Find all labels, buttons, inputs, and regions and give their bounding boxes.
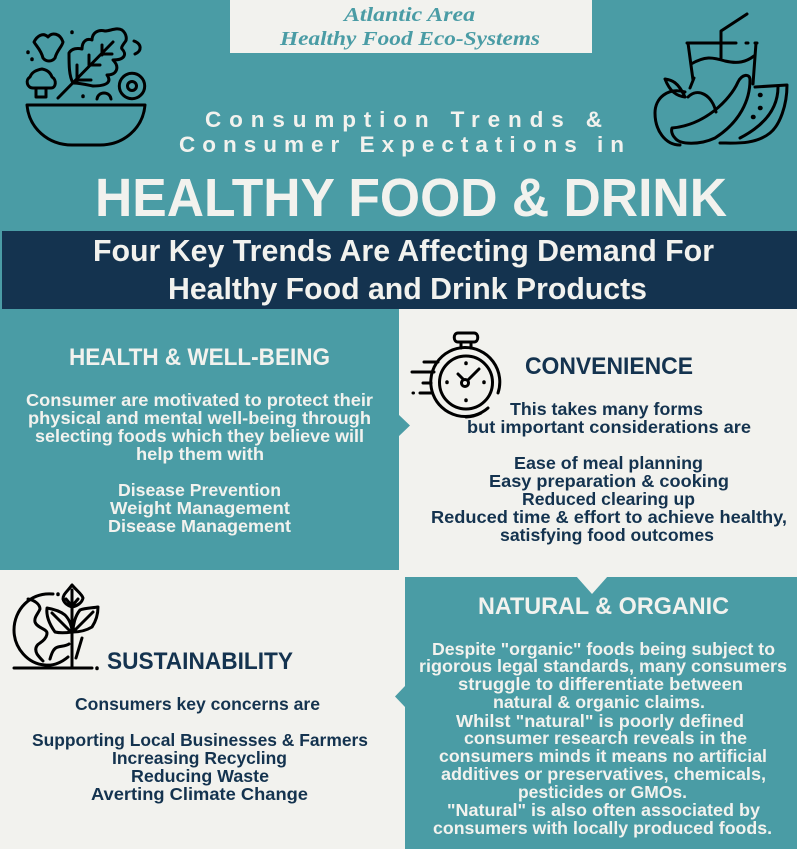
text: natural body: consumers with locally produced foods.	[433, 818, 772, 838]
text: health body: Consumer are motivated to protect their	[26, 390, 373, 410]
text: sustainability body	[32, 694, 368, 804]
text: natural body	[419, 639, 787, 838]
icon: stopwatch	[412, 333, 500, 417]
subtitle: Consumer Expectations in	[179, 132, 624, 157]
text: health body	[26, 390, 373, 536]
panel: health and well-being	[0, 309, 410, 570]
text: natural body: "Natural" is also often associated by	[447, 800, 760, 820]
text: natural body: rigorous legal standards, many consumers	[419, 656, 787, 676]
text: natural body: natural & organic claims.	[493, 692, 705, 712]
text: sustainability body: Increasing Recycling	[112, 748, 287, 768]
text: sustainability body: Averting Climate Change	[91, 784, 308, 804]
text: convenience body: satisfying food outcomes	[500, 525, 714, 545]
text: convenience body: Ease of meal planning	[514, 453, 703, 473]
text: health body: physical and mental well-being through	[28, 408, 371, 428]
text: natural body: struggle to differentiate between	[458, 674, 743, 694]
panel: sustainability	[0, 570, 405, 849]
text: convenience body: Reduced clearing up	[522, 489, 695, 509]
text: natural body: consumers minds it means no artificial	[439, 746, 767, 766]
text: health body: Disease Prevention	[118, 480, 281, 500]
text: health body: help them with	[136, 444, 264, 464]
banner: four key trends: Healthy Food and Drink Products	[168, 271, 647, 306]
text: natural body: consumer research reveals in the	[464, 728, 747, 748]
heading: sustainability: SUSTAINABILITY	[107, 648, 293, 675]
text: convenience body	[431, 399, 787, 545]
subtitle: Consumption Trends &	[205, 107, 602, 132]
pointer: health	[398, 414, 410, 437]
text: convenience body: This takes many forms	[510, 399, 703, 419]
text: natural body: pesticides or GMOs.	[518, 782, 687, 802]
text: health body: selecting foods which they believe will	[35, 426, 364, 446]
text: sustainability body: Consumers key concerns are	[75, 694, 320, 714]
title box: Healthy Food Eco-Systems	[279, 28, 540, 50]
title box: Atlantic Area	[342, 4, 475, 26]
text: sustainability body: Reducing Waste	[131, 766, 269, 786]
heading: natural and organic: NATURAL & ORGANIC	[478, 593, 729, 620]
heading: health and well-being: HEALTH & WELL-BEING	[69, 344, 330, 371]
text: natural body: Whilst "natural" is poorly defined	[456, 711, 744, 731]
pointer: natural top	[576, 576, 608, 594]
icon: salad bowl	[27, 29, 145, 145]
text: health body: Disease Management	[108, 516, 291, 536]
panel: convenience	[399, 309, 797, 577]
text: convenience body: Easy preparation & cooking	[489, 471, 729, 491]
text: health body: Weight Management	[110, 498, 290, 518]
banner: four key trends: Four Key Trends Are Affecting Demand For	[93, 233, 714, 268]
subtitle	[179, 107, 624, 157]
icon: juice and fruit	[655, 14, 787, 145]
banner: four key trends	[2, 231, 797, 309]
title box	[230, 0, 592, 53]
text: natural body: additives or preservatives, chemicals,	[441, 764, 766, 784]
text: natural body: Despite "organic" foods being subject to	[432, 639, 775, 659]
text: convenience body: but important considerations are	[467, 417, 751, 437]
text: convenience body: Reduced time & effort to achieve healthy,	[431, 507, 787, 527]
pointer: natural left	[395, 686, 405, 707]
main heading: HEALTHY FOOD & DRINK	[95, 168, 727, 228]
icon: globe and plant	[14, 585, 98, 668]
heading: convenience: CONVENIENCE	[525, 353, 693, 380]
text: sustainability body: Supporting Local Businesses & Farmers	[32, 730, 368, 750]
panel: natural and organic	[395, 576, 797, 849]
